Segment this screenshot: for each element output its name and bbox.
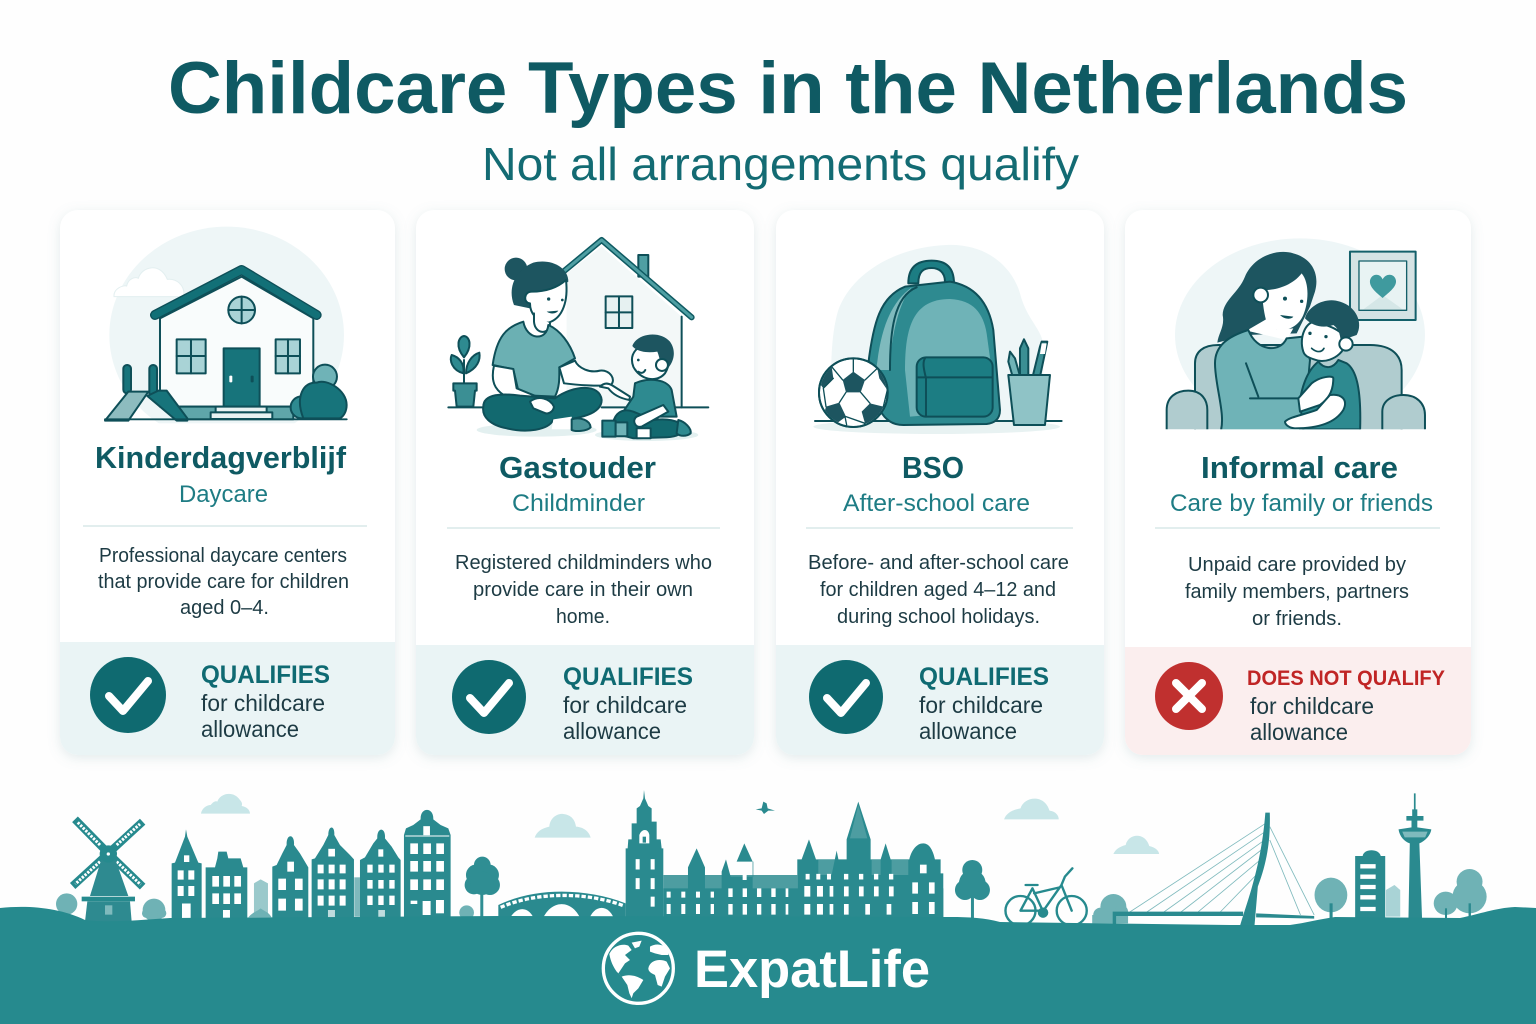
icon: check [809,660,883,734]
status footer: qualifies [416,645,754,755]
status text: for childcare [919,692,1043,718]
description: family members, partners [1185,581,1409,603]
description: Unpaid care provided by [1188,554,1406,576]
trees and buildings [1315,793,1487,920]
status text [919,663,1049,744]
status text [563,663,693,744]
icon: cross [1155,662,1223,730]
icon: check [90,657,166,733]
bridge [498,892,626,922]
skyline: centre with town hall and bridge [498,790,990,922]
clouds [535,814,591,838]
description: during school holidays. [837,606,1040,628]
cloud [201,794,250,814]
status text: for childcare [1250,693,1374,719]
description: that provide care for children [98,571,349,593]
card background [60,210,395,755]
illustration: backpack, ball and pencils [813,245,1062,434]
description: Before- and after-school care [808,552,1069,574]
status text: allowance [201,716,299,742]
status text: allowance [1250,719,1348,745]
description [1185,554,1409,630]
status text: allowance [919,718,1017,744]
status footer: qualifies [776,645,1104,755]
subheading: Daycare [179,481,268,508]
panel: Gastouder [416,210,754,755]
skyline: right with bicycle, Erasmus bridge and Euromast [1004,793,1487,927]
status footer: qualifies [60,642,395,755]
bicycle [1005,868,1087,925]
canal houses [172,810,451,920]
house windows [178,831,449,914]
description: or friends. [1252,608,1342,630]
heading: Kinderdagverblijf [95,440,347,475]
status footer: does not qualify [1125,647,1471,755]
clouds [1004,799,1159,854]
illustration: mother and child on sofa [1167,238,1425,433]
description: for children aged 4–12 and [820,579,1056,601]
small trees [56,879,474,921]
heading: BSO [902,450,964,485]
status text: QUALIFIES [563,663,693,691]
tree [955,860,990,918]
description [455,552,712,628]
status text [1247,667,1445,745]
logo: ExpatLife [603,933,930,1003]
description: home. [556,606,610,628]
ground band [0,907,1536,1024]
card background [776,210,1104,755]
panel: Informal care [1125,210,1471,755]
icon: globe [603,933,673,1003]
description [808,552,1069,628]
bush [1092,894,1128,923]
illustration: childminder with child [448,240,708,441]
panel: Kinderdagverblijf [60,210,395,755]
status text: DOES NOT QUALIFY [1247,667,1445,690]
skyline: left with windmill and canal houses [56,794,500,922]
title: Childcare Types in the Netherlands [168,48,1408,129]
subheading: Care by family or friends [1170,490,1433,517]
description: provide care in their own [473,579,693,601]
bird [756,802,775,814]
status text: for childcare [201,690,325,716]
panel: BSO [776,210,1104,755]
bridge [1113,813,1314,927]
card background [1125,210,1471,755]
status text: QUALIFIES [201,661,330,689]
heading: Informal care [1201,450,1398,485]
icon: check [452,660,526,734]
description: Professional daycare centers [99,545,347,567]
description: aged 0–4. [180,597,269,619]
status text: QUALIFIES [919,663,1049,691]
heading: Gastouder [499,450,656,485]
subheading: After-school care [843,490,1030,517]
description: Registered childminders who [455,552,712,574]
description [98,545,349,619]
tree [465,857,500,917]
card background [416,210,754,755]
windmill [73,819,143,922]
status text: allowance [563,718,661,744]
windows [636,864,936,909]
status text: for childcare [563,692,687,718]
subheading: Childminder [512,490,645,517]
illustration: daycare house [105,227,347,443]
town hall tower [626,790,663,920]
wordmark: ExpatLife [694,940,930,999]
palace [663,802,943,920]
status text [201,661,330,742]
subtitle: Not all arrangements qualify [482,138,1079,190]
